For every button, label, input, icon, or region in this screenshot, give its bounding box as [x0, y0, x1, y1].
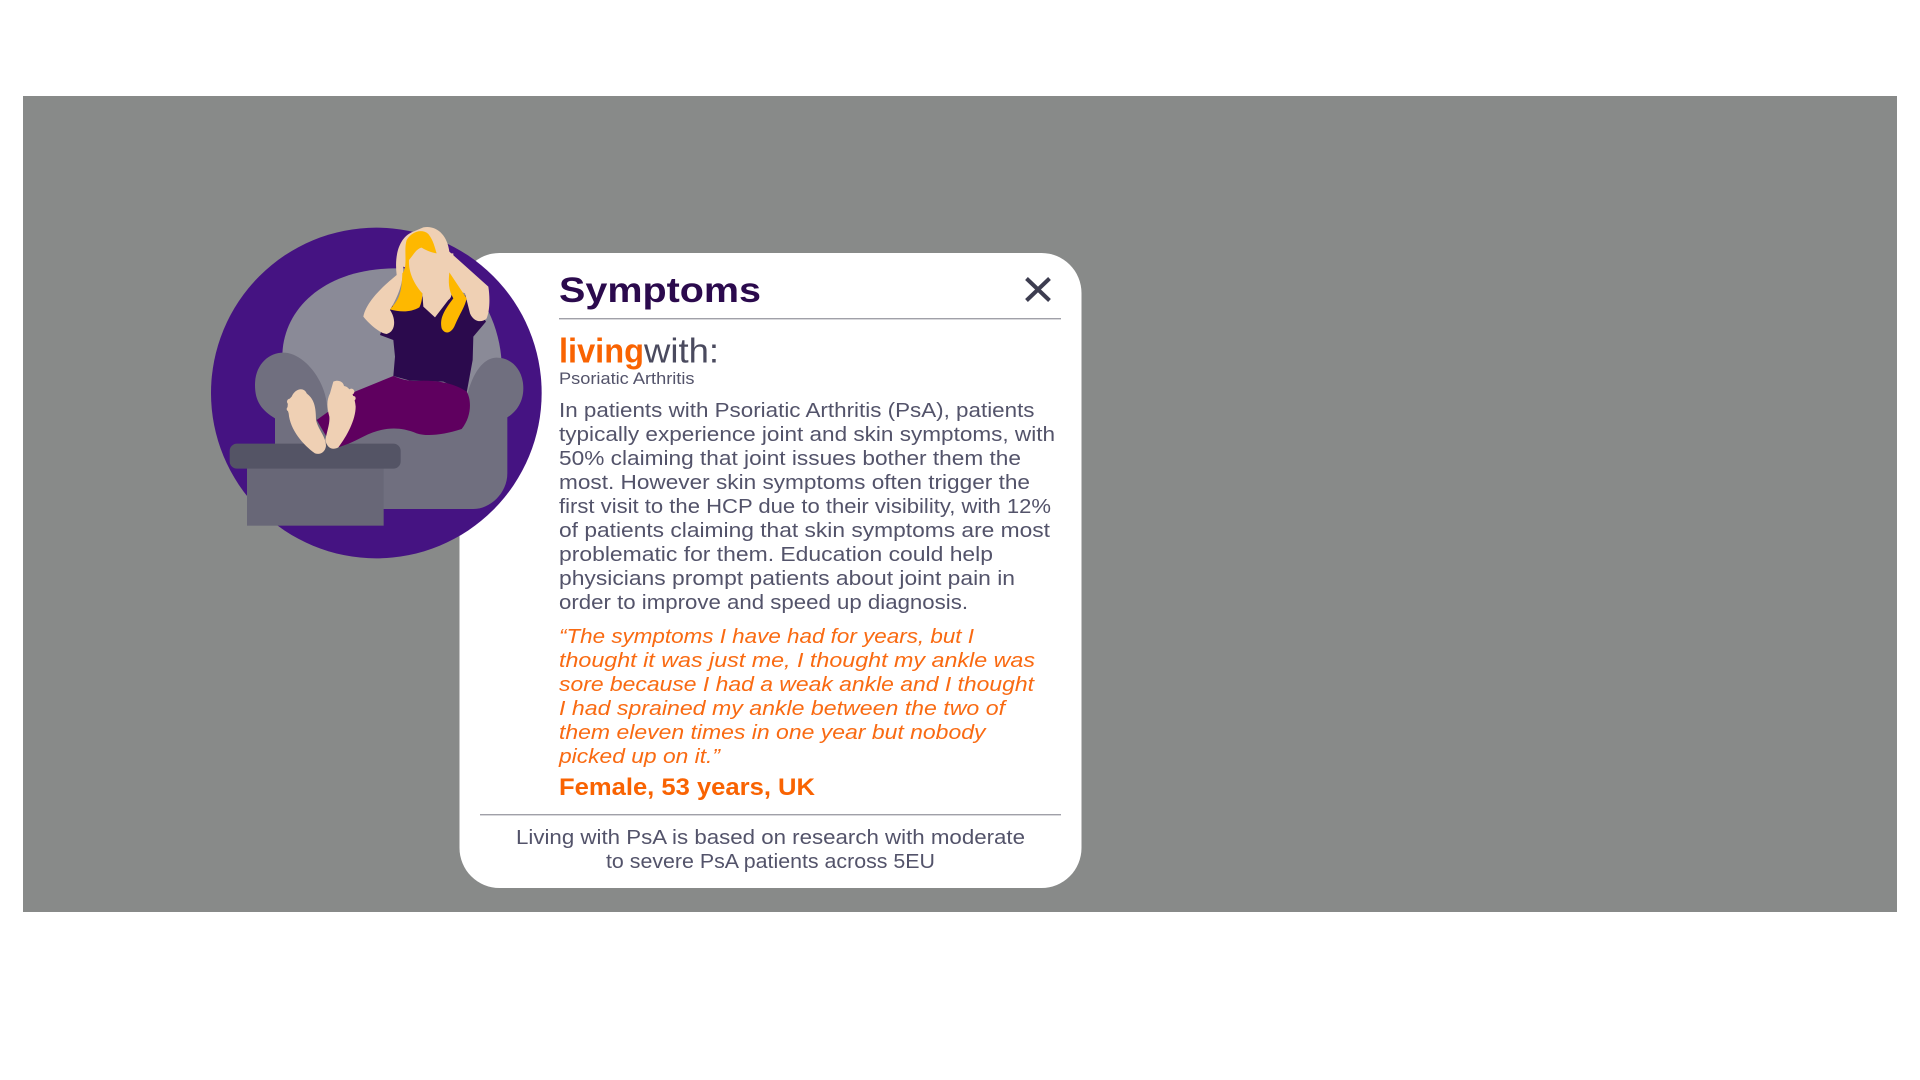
body text: problematic for them. Education could help: [559, 544, 993, 566]
footer note: Living with PsA is based on research with moderate: [516, 827, 1025, 849]
arms and hands: [363, 227, 489, 334]
footstool: [230, 444, 401, 526]
illustration: woman with head in hands on armchair: [211, 227, 542, 558]
body text: most. However skin symptoms often trigger the: [559, 472, 1030, 494]
patient quote: I had sprained my ankle between the two of: [559, 698, 1008, 720]
body text: In patients with Psoriatic Arthritis (PsA), patients: [559, 400, 1034, 422]
patient quote: sore because I had a weak ankle and I thought: [559, 674, 1036, 696]
footer divider: [480, 814, 1061, 815]
body text: order to improve and speed up diagnosis.: [559, 592, 968, 614]
purple circle: [211, 228, 542, 558]
body text: [559, 400, 1055, 614]
quote attribution: Female, 53 years, UK: [559, 774, 816, 801]
grey background panel: [23, 96, 1897, 912]
feet: [287, 381, 356, 454]
footer note: [516, 827, 1025, 873]
torso: [380, 290, 486, 393]
hair: [390, 231, 467, 332]
brand: living with: with:: [643, 332, 719, 370]
subheading: Psoriatic Arthritis: Psoriatic Arthritis: [559, 369, 694, 388]
patient quote: [558, 626, 1036, 768]
patient quote: “The symptoms I have had for years, but I: [559, 626, 974, 648]
armchair back: [282, 268, 502, 417]
brand: living with: living: [559, 332, 644, 370]
legs: [317, 376, 470, 448]
patient quote: thought it was just me, I thought my ankle was: [559, 650, 1035, 672]
panel: symptoms card: [460, 253, 1082, 888]
body text: first visit to the HCP due to their visibility, with 12%: [559, 496, 1051, 518]
body text: 50% claiming that joint issues bother them the: [559, 448, 1021, 470]
armchair seat and arms: [255, 353, 523, 509]
body text: of patients claiming that skin symptoms are most: [559, 520, 1051, 542]
footer note: to severe PsA patients across 5EU: [606, 851, 935, 873]
brand: living with: [559, 332, 719, 370]
body text: physicians prompt patients about joint pain in: [559, 568, 1015, 590]
patient quote: them eleven times in one year but nobody: [559, 722, 987, 744]
heading: Symptoms: Symptoms: [559, 271, 761, 310]
body text: typically experience joint and skin symptoms, with: [559, 424, 1055, 446]
icon: close cross: [1026, 278, 1050, 300]
patient quote: picked up on it.”: [558, 746, 722, 768]
face and neck: [408, 248, 453, 317]
header divider: [559, 318, 1061, 319]
